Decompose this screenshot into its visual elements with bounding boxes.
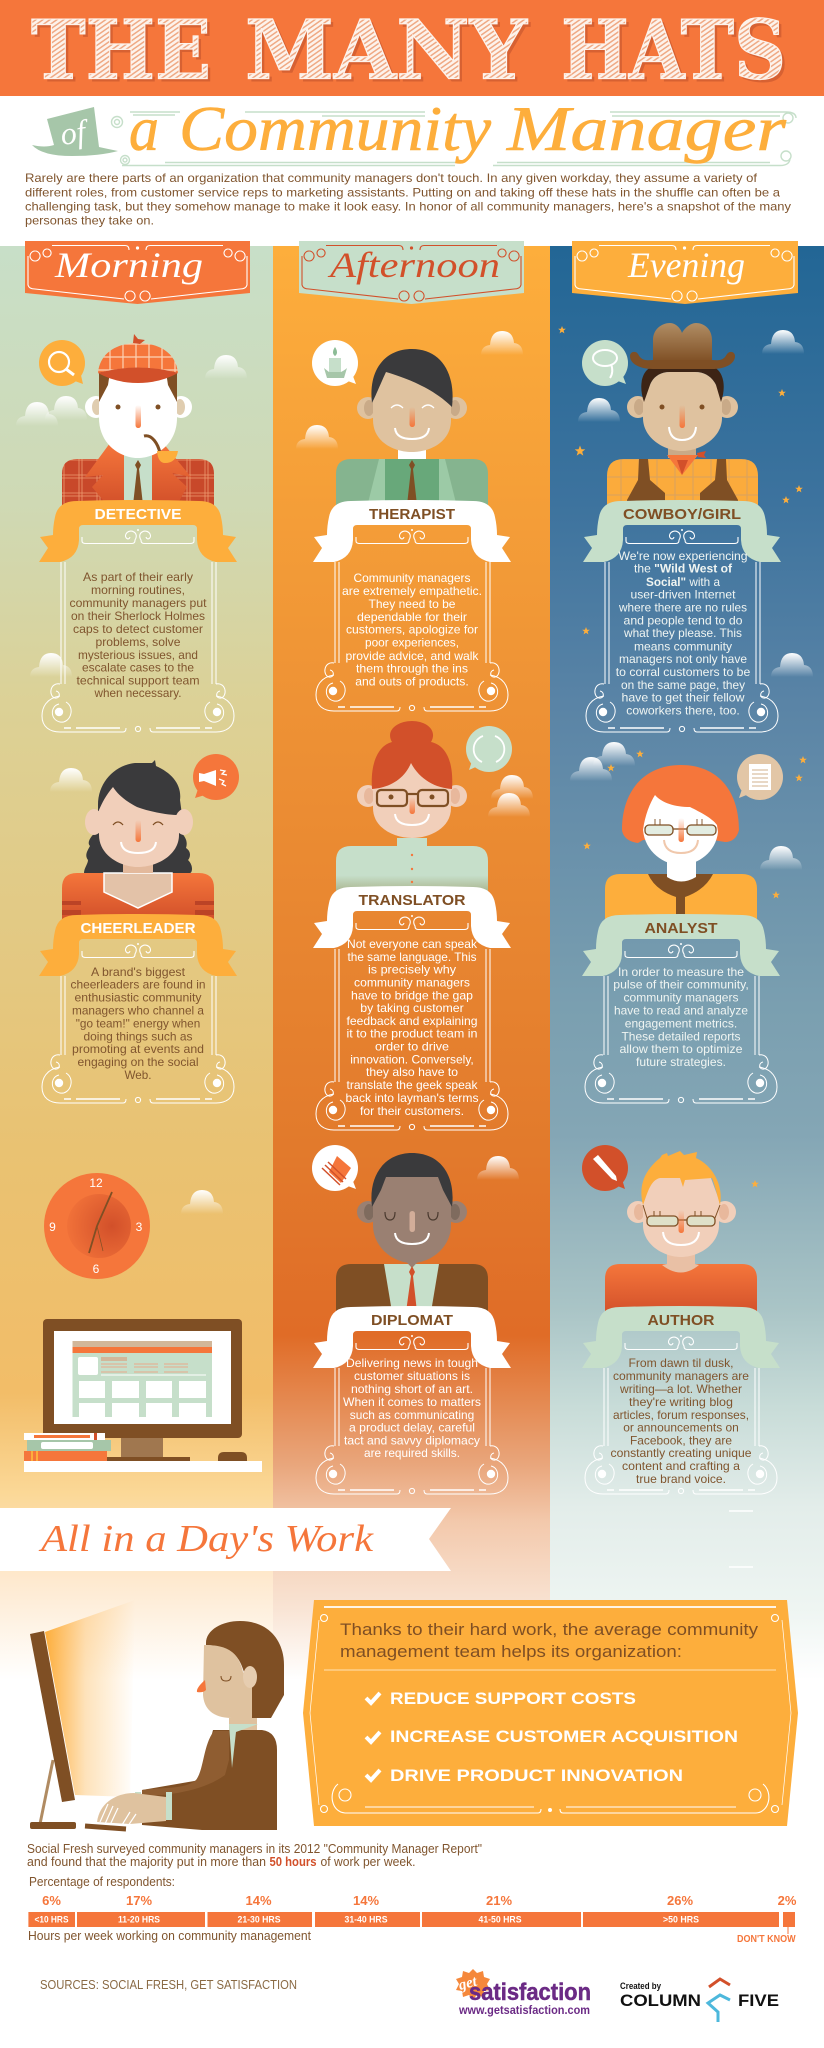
head: diplomat	[357, 1153, 467, 1263]
ribbon: translator	[313, 886, 511, 948]
heading: All in a Day's Work: All in a Day's Work	[38, 1518, 374, 1560]
sources: SOURCES: SOCIAL FRESH, GET SATISFACTION	[40, 1977, 297, 1992]
ribbon: translator: TRANSLATOR	[358, 892, 466, 909]
icon: megaphone bubble	[193, 754, 239, 800]
logo: column five: Created by	[620, 1981, 662, 1992]
survey text	[27, 1841, 482, 1869]
logo: column five: FIVE	[738, 1991, 779, 2010]
benefit list: REDUCE SUPPORT COSTS	[390, 1689, 636, 1708]
body: orange top	[62, 860, 214, 920]
bar labels: 41-50 HRS	[478, 1914, 522, 1924]
clock	[44, 1173, 150, 1279]
bar labels	[34, 1914, 699, 1924]
icon: lasso bubble	[582, 340, 628, 386]
banner: Morning	[25, 241, 250, 304]
text: translator: for their customers.	[360, 1104, 464, 1118]
persona: cheerleader	[39, 754, 239, 1103]
percentages: 21%	[486, 1893, 512, 1908]
ribbon: detective: DETECTIVE	[94, 506, 182, 523]
body: green blouse	[336, 838, 488, 895]
text: translator: innovation. Conversely,	[350, 1052, 474, 1066]
text: cowboy/girl: the "Wild West of	[634, 562, 733, 576]
body: plaid jacket	[62, 443, 214, 510]
text: author	[610, 1356, 752, 1486]
text: detective: community managers put	[70, 596, 207, 610]
text: cowboy/girl: to corral customers to be	[616, 665, 751, 679]
text: author: constantly creating unique	[610, 1446, 752, 1460]
text: detective: problems, solve	[96, 635, 181, 649]
text: cheerleader: cheerleaders are found in	[70, 978, 206, 992]
column: morning background	[0, 246, 273, 1680]
title banner: HATS	[564, 6, 789, 102]
column: evening background	[550, 246, 824, 1680]
monitor	[43, 1319, 242, 1462]
intro paragraph: challenging task, but they somehow manage to make it look easy. In honor of all community managers, here's a snapshot of the many	[25, 200, 791, 214]
text: therapist	[342, 571, 482, 688]
text: translator	[346, 937, 478, 1118]
bar labels: >50 HRS	[663, 1914, 699, 1924]
banner: Evening: Evening	[627, 245, 745, 285]
title banner	[0, 0, 824, 102]
hands typing	[97, 1793, 166, 1824]
persona: diplomat	[312, 1145, 511, 1494]
text: detective: escalate cases to the	[82, 660, 194, 674]
icon: rotating arrows bubble	[466, 726, 512, 772]
monitor glow	[45, 1600, 135, 1797]
clouds: evening column	[570, 330, 813, 1567]
text: author: they're writing blog	[629, 1395, 733, 1409]
ribbon: cowboy/girl: COWBOY/GIRL	[623, 506, 741, 523]
text: diplomat: such as communicating	[350, 1408, 474, 1422]
text: detective	[70, 570, 207, 700]
text: translator: have to bridge the gap	[351, 988, 473, 1002]
banner: Afternoon: Afternoon	[328, 245, 500, 285]
text: cowboy/girl: managers not only have	[619, 652, 747, 666]
ribbon: therapist	[313, 500, 511, 562]
text: cowboy/girl: coworkers there, too.	[626, 704, 740, 718]
text: translator: order to drive	[375, 1040, 449, 1054]
text: cheerleader: engaging on the social	[78, 1055, 198, 1069]
text: diplomat: customer situations is	[354, 1369, 470, 1383]
text: cheerleader: A brand's biggest	[91, 965, 186, 979]
text: translator: is precisely why	[368, 962, 456, 976]
head: translator	[357, 721, 467, 838]
text: cowboy/girl: means community	[634, 640, 732, 654]
logo: get satisfaction: get	[456, 1973, 480, 1994]
text: diplomat: tact and savvy diplomacy	[344, 1434, 480, 1448]
text: analyst: allow them to optimize	[620, 1042, 743, 1056]
icon: pipe	[144, 436, 178, 463]
frame	[316, 1368, 508, 1494]
text: author: From dawn til dusk,	[628, 1356, 734, 1370]
clock: 12	[89, 1176, 103, 1190]
frame	[316, 949, 508, 1130]
heading: All in a Day's Work	[0, 1508, 451, 1571]
head: analyst	[622, 765, 739, 882]
bar labels: <10 HRS	[34, 1914, 68, 1924]
text: therapist: are extremely empathetic.	[342, 584, 482, 598]
frame	[42, 976, 234, 1103]
chart heading: Percentage of respondents:	[29, 1874, 175, 1889]
icon: cowboy hat	[630, 323, 735, 369]
subtitle: hat with "of"	[32, 107, 118, 156]
books	[24, 1433, 111, 1461]
text: cowboy/girl: We're now experiencing	[618, 549, 748, 563]
body: green suit	[336, 449, 488, 510]
percentages	[42, 1893, 797, 1908]
chart axis caption: Hours per week working on community management	[28, 1928, 311, 1943]
bar labels: 21-30 HRS	[238, 1914, 280, 1924]
text: author: or announcements on	[623, 1420, 739, 1434]
subtitle: hat with "of": of	[58, 112, 92, 152]
text: translator: translate the geek speak	[346, 1078, 478, 1092]
title text: HATS	[561, 4, 786, 98]
text: cowboy/girl: user-driven Internet	[630, 588, 736, 602]
frame	[585, 1368, 777, 1494]
text: diplomat: When it comes to matters	[343, 1395, 481, 1409]
subtitle ornament frame	[112, 112, 796, 166]
text: cheerleader: Web.	[124, 1068, 152, 1082]
text: translator: it to the product team in	[346, 1026, 478, 1040]
frame	[316, 562, 508, 711]
text: author: true brand voice.	[636, 1472, 726, 1486]
persona: translator	[313, 721, 512, 1130]
icon: glasses	[377, 790, 448, 806]
text: cowboy/girl: what they please. This	[623, 626, 742, 640]
text: cheerleader: "go team!" energy when	[76, 1016, 200, 1030]
subtitle: a Community Manager: Community	[179, 93, 492, 164]
text: analyst: community managers	[624, 990, 738, 1004]
ribbon: cheerleader	[39, 914, 237, 976]
computer side view	[30, 1631, 126, 1829]
text: cheerleader: managers who channel a	[72, 1004, 204, 1018]
intro paragraph: Rarely are there parts of an organization that community managers don't touch. In any given workday, they assume a variety of	[25, 171, 758, 185]
desk with computer and books	[24, 1319, 262, 1472]
text: therapist: dependable for their	[357, 610, 467, 624]
title text: MANY	[245, 4, 528, 98]
intro paragraph	[25, 171, 791, 228]
logo: get satisfaction: www.getsatisfaction.com	[458, 2003, 590, 2017]
clock: 9	[49, 1220, 56, 1234]
benefit list	[366, 1689, 738, 1785]
frame	[585, 976, 777, 1103]
text: therapist: poor experiences,	[365, 636, 459, 650]
text: cowboy/girl: on the same page, they	[621, 678, 745, 692]
icon: candle bubble	[312, 340, 358, 386]
text: cheerleader: enthusiastic community	[74, 990, 202, 1004]
text: detective: As part of their early	[83, 570, 193, 584]
body: brown suit	[336, 1252, 488, 1315]
banner: Morning: Morning	[54, 245, 203, 285]
bars	[28, 1912, 795, 1927]
bar labels: 11-20 HRS	[118, 1914, 160, 1924]
subtitle: a Community Manager: a	[129, 93, 159, 164]
text: translator: by taking customer	[360, 1001, 464, 1015]
head: cheerleader	[85, 787, 193, 867]
text: detective: caps to detect customer	[73, 622, 203, 636]
ribbon: author	[582, 1306, 780, 1368]
text: author: community managers are	[613, 1369, 749, 1383]
text: author: Facebook, they are	[630, 1434, 732, 1448]
percentages: 14%	[353, 1893, 379, 1908]
percentages: 26%	[667, 1893, 693, 1908]
bar labels: 31-40 HRS	[344, 1914, 388, 1924]
clock: 6	[93, 1262, 100, 1276]
clouds: morning column	[16, 355, 247, 1214]
callout heading: Thanks to their hard work, the average community	[340, 1620, 759, 1639]
column: afternoon background	[273, 246, 550, 1680]
text: diplomat: a product delay, careful	[349, 1420, 475, 1434]
desk	[24, 1461, 262, 1472]
text: translator: community managers	[354, 976, 470, 990]
text: translator: back into layman's terms	[346, 1091, 478, 1105]
ribbon: diplomat	[313, 1306, 511, 1368]
callout heading	[340, 1620, 759, 1661]
ribbon: cowboy/girl	[583, 500, 781, 562]
text: therapist: They need to be	[368, 597, 456, 611]
persona: cowboy/girl	[582, 323, 781, 732]
ribbon: detective	[39, 500, 237, 562]
survey text: of work per week.	[320, 1854, 416, 1869]
text: analyst: In order to measure the	[618, 965, 744, 979]
text: diplomat	[343, 1356, 481, 1460]
frame	[586, 562, 778, 732]
clock: 3	[136, 1220, 143, 1234]
survey text: 50 hours	[270, 1854, 316, 1869]
body: orange sweater	[605, 1250, 757, 1315]
title text	[31, 4, 786, 98]
text: cheerleader	[70, 965, 206, 1082]
ribbon: diplomat: DIPLOMAT	[371, 1312, 453, 1329]
text: author: articles, forum responses,	[613, 1408, 749, 1422]
percentages: 17%	[126, 1893, 152, 1908]
head: detective	[85, 334, 192, 458]
text: translator: they also have to	[366, 1065, 458, 1079]
text: analyst: have to read and analyze	[614, 1004, 748, 1018]
persona: author	[582, 1145, 780, 1494]
intro paragraph: personas they take on.	[25, 214, 154, 228]
banner: Afternoon	[299, 241, 524, 304]
torso and arm	[135, 1718, 277, 1830]
text: author: content and crafting a	[622, 1459, 740, 1473]
illustration: person at computer	[30, 1600, 284, 1830]
icon: deerstalker hat	[98, 334, 178, 383]
title text: THE	[31, 4, 211, 98]
logo: get satisfaction	[456, 1969, 591, 2017]
stars: evening column	[558, 326, 807, 1187]
text: cowboy/girl: where there are no rules	[618, 600, 747, 614]
survey text: and found that the majority put in more than	[27, 1854, 266, 1869]
text: translator: Not everyone can speak	[347, 937, 478, 951]
icon: pencil bubble	[582, 1145, 628, 1191]
percentages: 6%	[42, 1893, 61, 1908]
frame	[42, 562, 234, 732]
subtitle: a Community Manager: Manager	[506, 93, 787, 164]
ribbon: author: AUTHOR	[648, 1312, 715, 1329]
ribbon: analyst: ANALYST	[645, 920, 717, 937]
ribbon: cheerleader: CHEERLEADER	[80, 920, 196, 937]
head: author	[627, 1151, 736, 1257]
text: diplomat: are required skills.	[364, 1446, 460, 1460]
icon: handshake bubble	[312, 1145, 358, 1191]
callout heading: management team helps its organization:	[340, 1642, 682, 1661]
text: cowboy/girl: have to get their fellow	[622, 690, 745, 704]
head: therapist	[357, 349, 467, 452]
text: analyst: pulse of their community,	[613, 978, 749, 992]
text: detective: on their Sherlock Holmes	[71, 609, 205, 623]
callout panel: benefits	[303, 1600, 798, 1826]
text: analyst: These detailed reports	[622, 1030, 740, 1044]
head: cowboy	[627, 323, 738, 451]
text: analyst	[613, 965, 749, 1069]
text: translator: feedback and explaining	[346, 1014, 478, 1028]
mouse	[218, 1452, 247, 1461]
percentages: 14%	[245, 1893, 272, 1908]
clouds: afternoon column	[296, 331, 533, 1180]
text: translator: the same language. This	[348, 950, 476, 964]
text: therapist: Community managers	[354, 571, 470, 585]
bar chart: hours per week	[28, 1893, 797, 1934]
text: cheerleader: promoting at events and	[72, 1042, 204, 1056]
text: therapist: customers, apologize for	[346, 622, 478, 636]
logo: column five: COLUMN	[620, 1991, 701, 2010]
survey text: Social Fresh surveyed community managers in its 2012 "Community Manager Report"	[27, 1841, 482, 1856]
text: detective: mysterious issues, and	[78, 648, 198, 662]
logo: get satisfaction: satisfaction	[469, 1979, 591, 2006]
benefit list: INCREASE CUSTOMER ACQUISITION	[390, 1727, 738, 1746]
subtitle: a Community Manager	[129, 93, 787, 164]
body: plaid shirt and vest	[607, 448, 758, 510]
text: detective: technical support team	[76, 674, 200, 688]
text: analyst: engagement metrics.	[625, 1016, 737, 1030]
text: cheerleader: doing things such as	[84, 1030, 192, 1044]
icon: notepad bubble	[737, 754, 783, 800]
don't know label: DON'T KNOW	[737, 1934, 796, 1945]
text: analyst: future strategies.	[636, 1055, 726, 1069]
body: yellow cardigan	[605, 874, 757, 920]
benefit list: DRIVE PRODUCT INNOVATION	[390, 1766, 683, 1785]
title banner: THE	[34, 6, 214, 102]
text: diplomat: nothing short of an art.	[351, 1382, 473, 1396]
ribbon: analyst	[582, 914, 780, 976]
text: therapist: them through the ins	[356, 662, 468, 676]
text: detective: morning routines,	[91, 583, 185, 597]
title banner: MANY	[248, 6, 531, 102]
banner: Evening	[572, 241, 798, 304]
text: cowboy/girl	[616, 549, 751, 718]
persona: detective	[39, 334, 237, 732]
intro paragraph: different roles, from customer service reps to marketing assistants. Putting on and taking off these hats in the shuffle can often be a	[25, 186, 780, 200]
head side view	[197, 1621, 284, 1718]
text: detective: when necessary.	[94, 686, 182, 700]
logo: column five	[620, 1979, 779, 2022]
text: therapist: provide advice, and walk	[346, 649, 479, 663]
ribbon: therapist: THERAPIST	[369, 506, 455, 523]
persona: analyst	[582, 754, 783, 1103]
text: cowboy/girl: and people tend to do	[624, 614, 743, 628]
hair: black curls	[84, 760, 192, 873]
icon: magnifying glass bubble	[39, 340, 85, 386]
percentages: 2%	[778, 1893, 797, 1908]
text: diplomat: Delivering news in tough	[346, 1356, 478, 1370]
text: therapist: and outs of products.	[355, 674, 469, 688]
text: author: writing—a lot. Whether	[619, 1382, 742, 1396]
text: cowboy/girl: Social" with a	[646, 575, 720, 589]
persona: therapist	[312, 340, 511, 711]
